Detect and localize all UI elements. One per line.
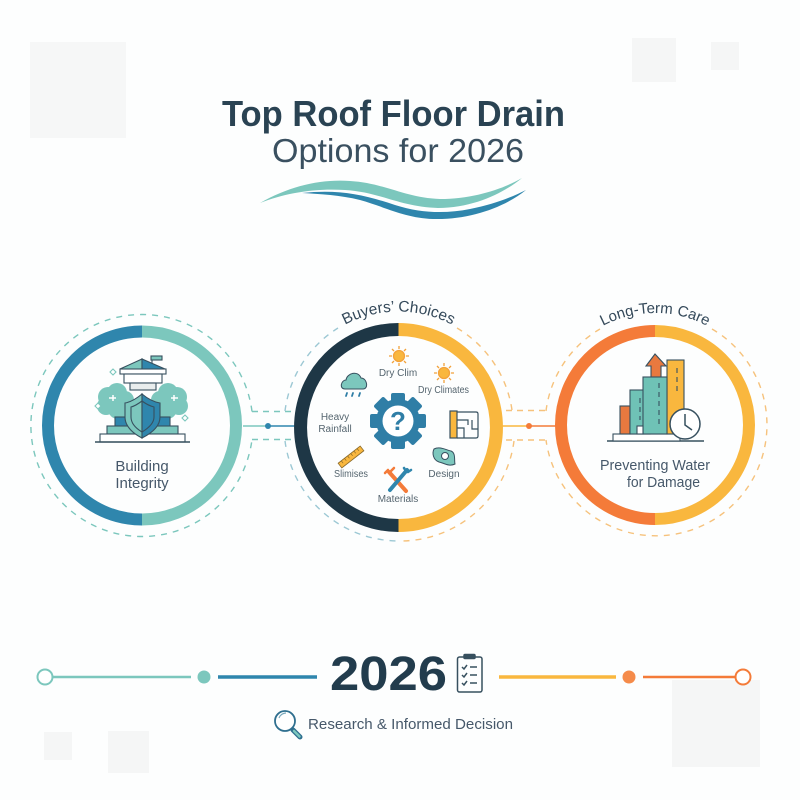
panel: building integrity <box>31 315 252 536</box>
title line 2: Options for 2026 <box>272 132 524 169</box>
label: slimises: Slimises <box>334 469 368 480</box>
timeline left <box>38 670 317 684</box>
icon: blueprint ruler <box>450 411 478 438</box>
label: dry climates: Dry Climates <box>418 385 469 396</box>
label: heavy rainfall: Rainfall <box>318 424 352 435</box>
label: dry clim: Dry Clim <box>379 368 417 379</box>
panel: buyers choices <box>284 300 515 542</box>
label: building integrity <box>115 458 169 492</box>
connector: choices to care <box>502 410 556 440</box>
year 2026: 2026 <box>330 648 447 701</box>
label: design: Design <box>428 469 460 480</box>
label: heavy rainfall: Heavy <box>321 412 349 423</box>
dashed outer ring <box>31 315 252 536</box>
icon: design <box>433 448 455 465</box>
split ring <box>48 332 236 520</box>
icon: buildings with arrow and clock <box>607 354 704 441</box>
icon: rain cloud <box>341 373 367 396</box>
icon: sun two <box>434 363 454 383</box>
label: materials: Materials <box>378 494 418 505</box>
curved heading: Buyers’ Choices <box>342 300 454 324</box>
wave decoration <box>260 178 526 219</box>
connector: integrity to choices <box>243 412 296 440</box>
icon: slanted ruler <box>338 446 364 468</box>
title line 1: Top Roof Floor Drain <box>222 93 565 134</box>
label: preventing water for damage <box>600 457 710 491</box>
icon: building with shield <box>95 356 190 442</box>
caption: Research & Informed Decision <box>308 716 513 733</box>
title <box>222 93 565 169</box>
curved heading: Long-Term Care <box>600 302 709 326</box>
timeline right <box>499 670 750 684</box>
panel: long-term care <box>545 302 768 536</box>
label: preventing water for damage: Preventing Water <box>600 457 710 474</box>
icon: sun one <box>389 346 409 366</box>
dashed outer ring <box>546 329 767 536</box>
label: preventing water for damage: for Damage <box>627 474 700 491</box>
icon: clipboard <box>458 654 482 692</box>
label: building integrity: Integrity <box>115 475 169 492</box>
icon: gear with question mark <box>370 393 426 449</box>
label: heavy rainfall <box>318 412 352 435</box>
dashed outer ring <box>285 328 514 541</box>
split ring <box>561 331 749 519</box>
icon: magnifier <box>275 711 300 737</box>
icon: gear with question mark: ? <box>390 406 406 436</box>
split ring <box>301 330 496 526</box>
icon: crossed tools <box>385 468 411 491</box>
label: building integrity: Building <box>115 458 169 475</box>
